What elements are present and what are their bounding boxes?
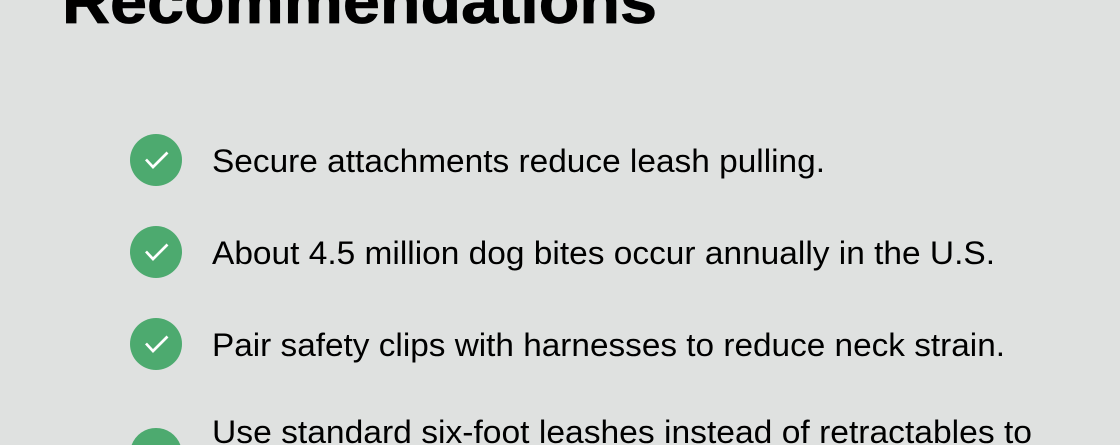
item text: About 4.5 million dog bites occur annually in the U.S. bbox=[212, 235, 995, 271]
list item: standard leashes bbox=[132, 414, 1032, 445]
item text: Pair safety clips with harnesses to reduce neck strain. bbox=[212, 327, 1005, 363]
list item: safety clips bbox=[130, 318, 1005, 370]
item text: Secure attachments reduce leash pulling. bbox=[212, 143, 825, 179]
list item: secure attachments bbox=[130, 134, 825, 186]
icon: green check circle bbox=[130, 226, 182, 278]
icon: green check circle bbox=[130, 318, 182, 370]
list item: dog bites bbox=[130, 226, 995, 278]
icon: green check circle bbox=[132, 428, 180, 445]
icon: green check circle bbox=[130, 134, 182, 186]
